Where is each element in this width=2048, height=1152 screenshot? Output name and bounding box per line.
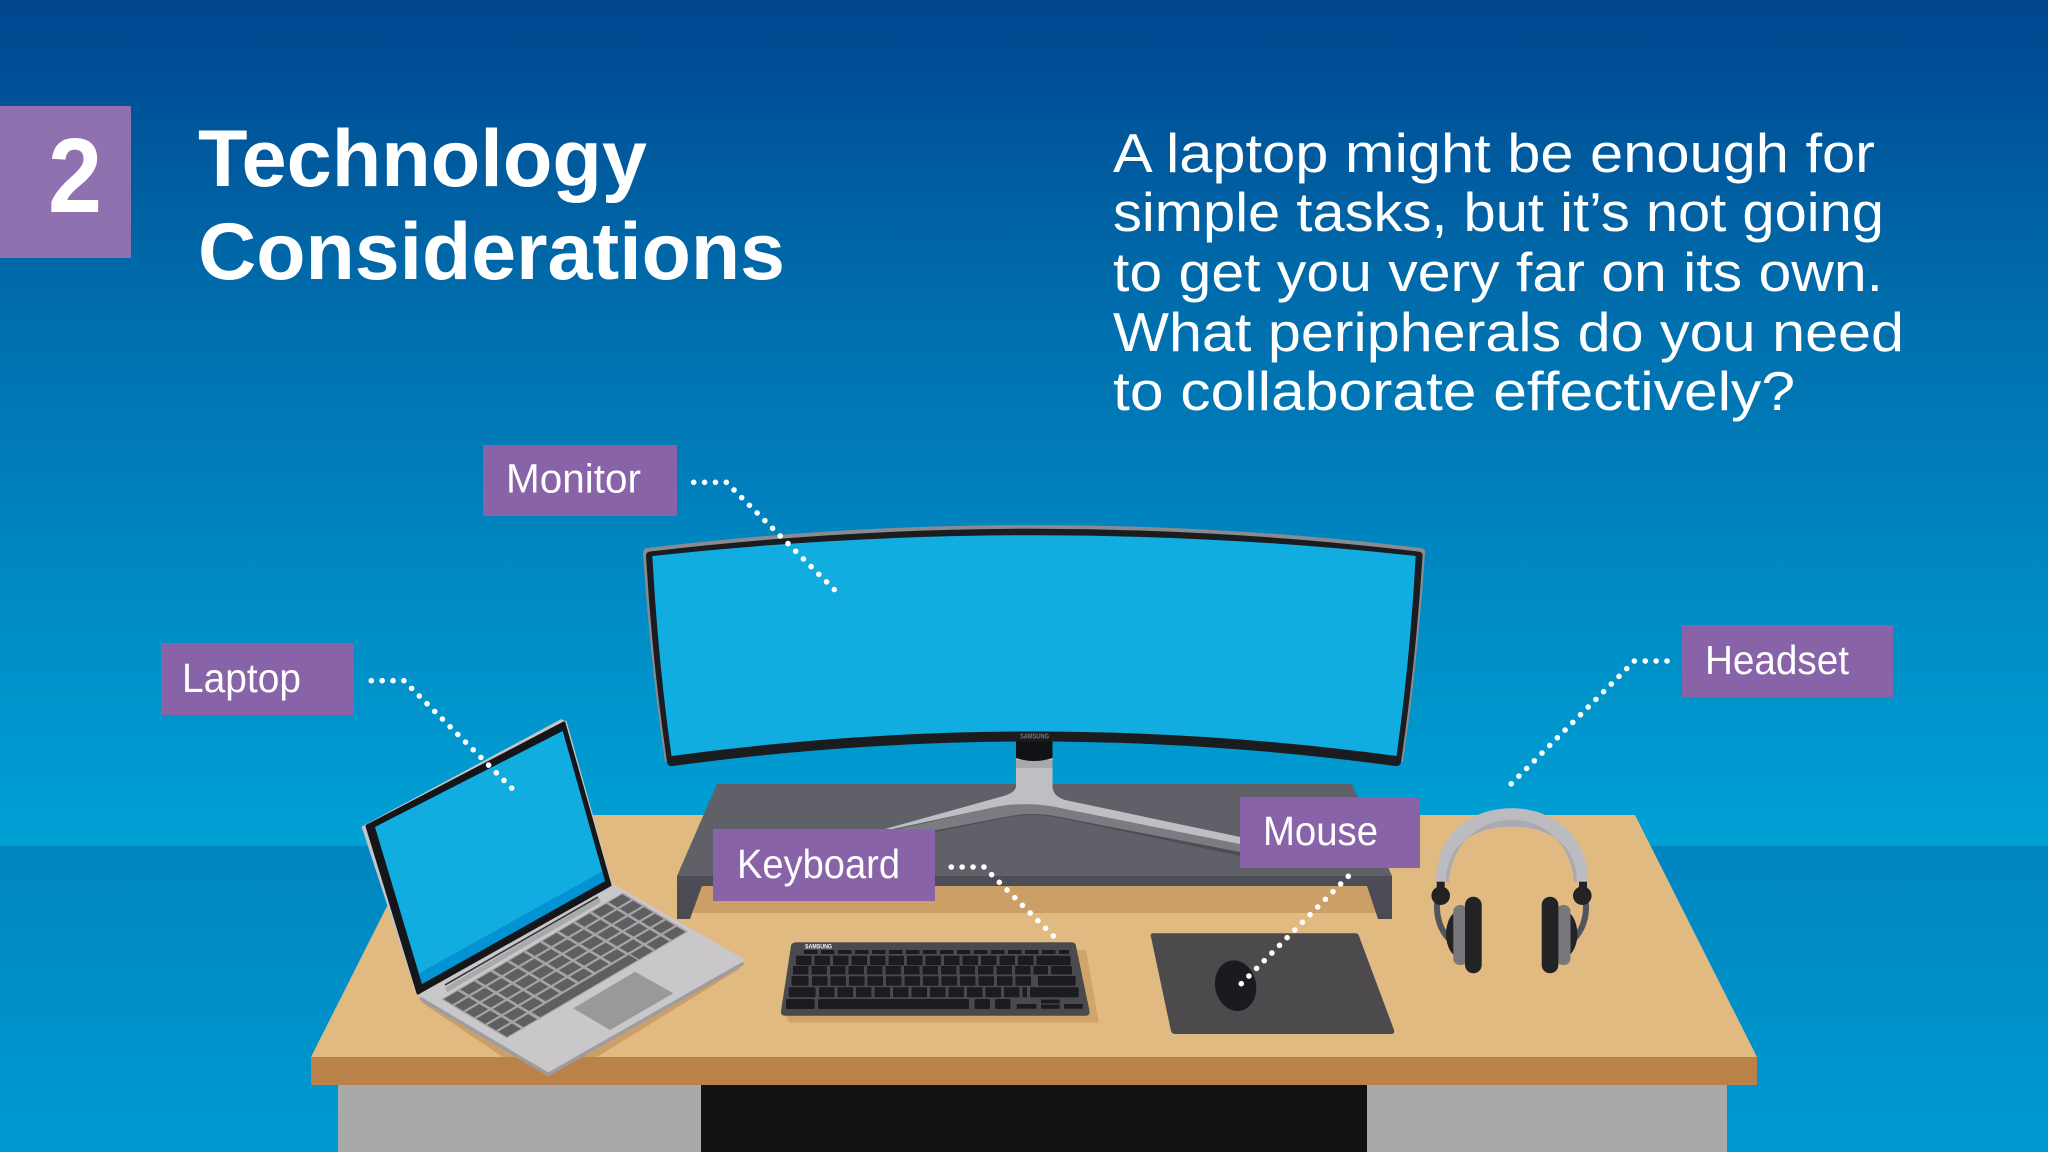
label: monitor: Monitor	[506, 456, 641, 502]
section number badge: 2	[48, 117, 102, 235]
intro paragraph: to get you very far on its own.	[1113, 241, 1883, 303]
headband	[1436, 808, 1588, 882]
dotted leader: headset	[1509, 661, 1667, 786]
right ear cup	[1542, 897, 1577, 973]
right connector	[1579, 882, 1587, 890]
monitor stand	[860, 736, 1245, 857]
external keyboard	[781, 942, 1099, 1023]
label: keyboard: Keyboard	[737, 841, 900, 887]
mouse	[1210, 956, 1261, 1015]
desk front edge	[311, 1057, 1757, 1085]
keyboard logo: SAMSUNG	[805, 944, 832, 950]
laptop touchpad	[573, 972, 673, 1030]
laptop keyboard	[441, 893, 688, 1038]
desk	[311, 815, 1757, 1152]
label: monitor	[483, 445, 677, 516]
label: headset	[1682, 625, 1893, 697]
label: keyboard	[713, 829, 935, 901]
left ear cup	[1446, 897, 1482, 973]
laptop	[362, 720, 742, 1074]
monitor	[643, 525, 1425, 857]
monitor logo: SAMSUNG	[1020, 734, 1049, 740]
laptop lid rim	[362, 720, 612, 994]
section number badge	[0, 106, 131, 258]
intro paragraph: simple tasks, but it’s not going	[1113, 181, 1884, 243]
right hinge	[1573, 886, 1592, 905]
label: laptop: Laptop	[182, 655, 301, 701]
title: Considerations	[198, 207, 785, 297]
mouse pad	[1151, 933, 1394, 1034]
label: mouse: Mouse	[1263, 808, 1378, 854]
left hinge	[1431, 886, 1450, 905]
dotted leader: monitor	[694, 482, 837, 592]
label: headset: Headset	[1705, 637, 1850, 683]
desk legs and drawer	[338, 1085, 1727, 1152]
laptop bezel	[367, 723, 610, 993]
label: laptop	[161, 643, 354, 715]
laptop screen lower band	[420, 872, 605, 984]
title	[198, 114, 785, 297]
keyboard shadow	[785, 950, 1099, 1023]
intro paragraph	[1113, 122, 1904, 422]
laptop hinge	[445, 897, 600, 990]
headset	[1431, 808, 1592, 973]
monitor screen	[652, 535, 1416, 756]
dotted leader: keyboard	[951, 867, 1056, 939]
left connector	[1437, 882, 1445, 890]
keyboard keys	[786, 952, 1083, 1009]
laptop base edge	[422, 889, 742, 1074]
headband inner shade	[1446, 820, 1577, 882]
intro paragraph: to collaborate effectively?	[1113, 360, 1795, 422]
laptop base	[422, 885, 742, 1070]
left arm	[1437, 903, 1449, 939]
intro paragraph: What peripherals do you need	[1113, 301, 1904, 363]
right arm	[1574, 903, 1586, 939]
title: Technology	[198, 114, 647, 204]
dotted leader: laptop	[371, 681, 514, 790]
laptop screen	[375, 731, 605, 984]
dotted leader: mouse	[1238, 876, 1348, 986]
keyboard body	[781, 942, 1090, 1016]
laptop shadow	[421, 968, 741, 1057]
monitor bezel	[646, 529, 1423, 766]
label: mouse	[1240, 797, 1420, 868]
monitor rim	[643, 525, 1425, 762]
monitor riser	[677, 784, 1392, 919]
intro paragraph: A laptop might be enough for	[1113, 122, 1875, 184]
desk top	[311, 815, 1757, 1057]
